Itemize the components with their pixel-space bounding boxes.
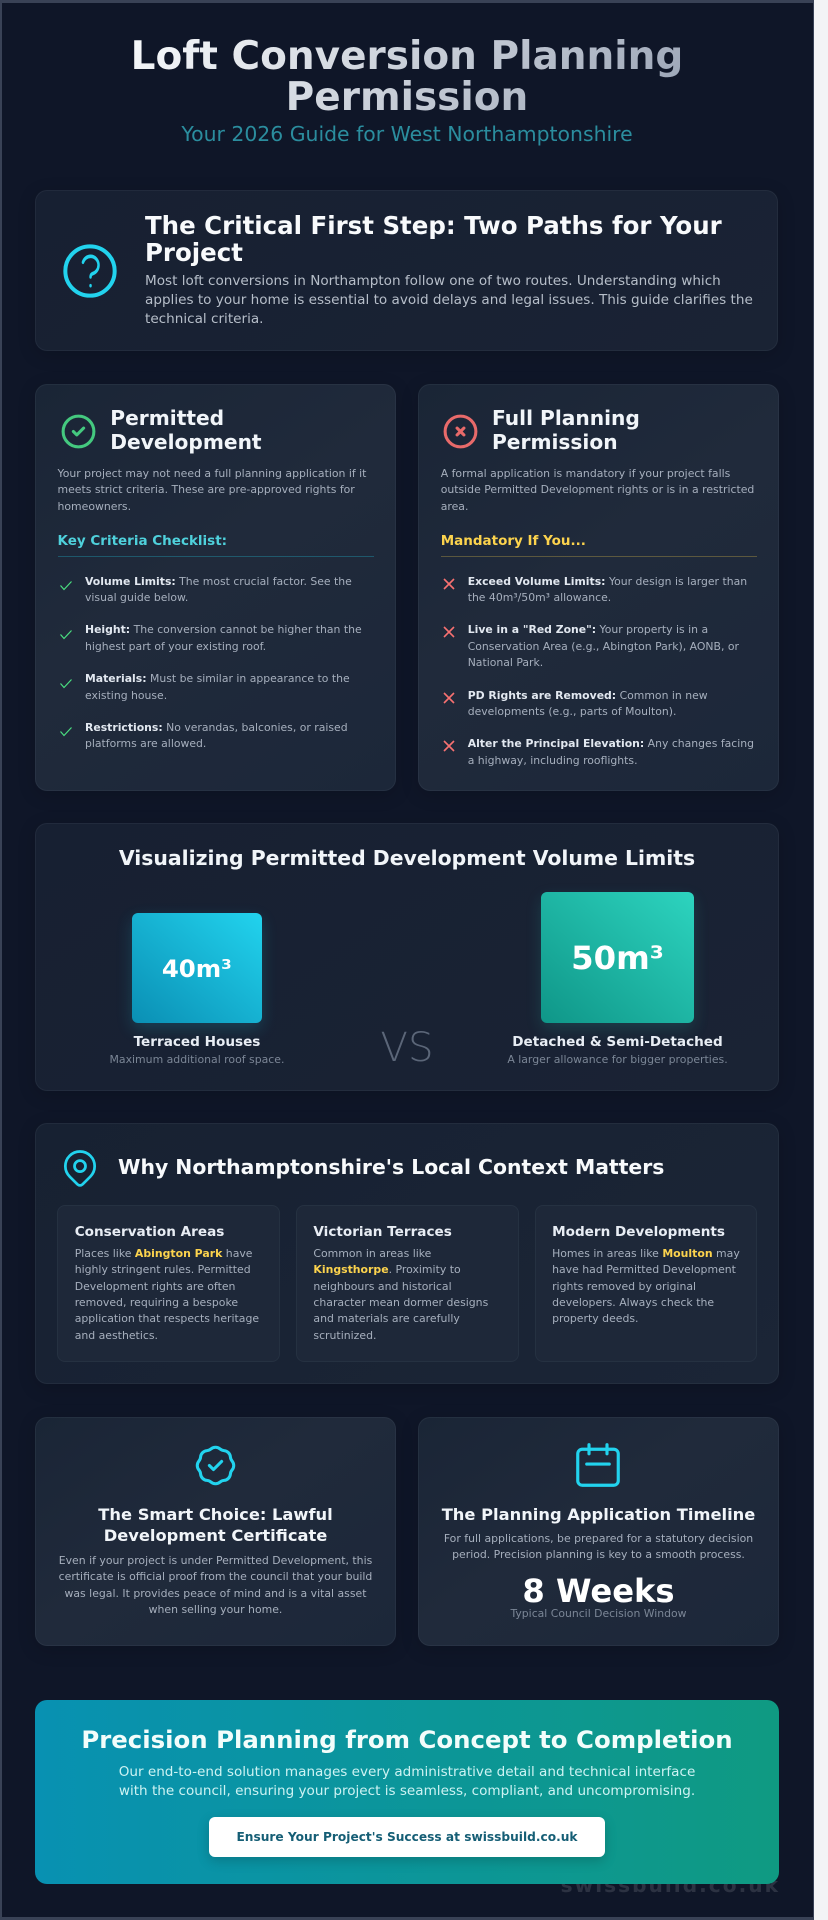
icon: check circle (62, 414, 96, 448)
caption: detached and semi-detached: A larger allowance for bigger properties. (507, 1053, 728, 1066)
heading: permitted development: Development (110, 430, 262, 454)
heading: critical first step: The Critical First Step: Two Paths for Your (145, 211, 722, 240)
intro text: Most loft conversions in Northampton follow one of two routes. Understanding which (145, 273, 721, 289)
panel: application timeline (418, 1417, 779, 1646)
certificate text: Even if your project is under Permitted Development, this (59, 1554, 372, 1567)
heading: full planning permission: Permission (492, 430, 618, 454)
description: homeowners. (58, 500, 131, 513)
checklist item: height (60, 623, 362, 653)
certificate text: was legal. It provides peace of mind and is a vital asset (64, 1587, 366, 1600)
description: meets strict criteria. These are pre-approved rights for (58, 483, 355, 496)
requirement: red zone: Conservation Area (e.g., Abington Park), AONB, or (468, 640, 739, 653)
checklist item: height: highest part of your existing roof. (85, 640, 266, 653)
card text: highly stringent rules. Permitted (75, 1263, 251, 1276)
statistic: 8 weeks: 8 Weeks (522, 1572, 675, 1610)
call to action text: with the council, ensuring your project is seamless, compliant, and uncompromising. (119, 1783, 695, 1799)
description (58, 467, 366, 513)
subheading: key criteria: Key Criteria Checklist: (58, 533, 227, 549)
volume block: 50m3: 50m³ (571, 938, 664, 976)
checklist item: restrictions (60, 721, 348, 750)
title: Permission (286, 74, 528, 120)
card title: Victorian Terraces (313, 1224, 452, 1240)
call to action text: Our end-to-end solution manages every administrative detail and technical interface (119, 1764, 695, 1780)
panel: local context (35, 1123, 779, 1384)
button (209, 1817, 605, 1857)
requirement: principal elevation (444, 737, 754, 767)
card text (75, 1247, 259, 1342)
card text: property deeds. (552, 1312, 639, 1325)
requirement: exceed volume limits: the 40m³/50m³ allowance. (468, 591, 611, 604)
panel: full planning permission: National Park. (468, 656, 543, 669)
subtitle: Your 2026 Guide for West Northamptonshire (181, 122, 633, 146)
watermark: swissbuild.co.uk (561, 1873, 780, 1897)
subheading: mandatory if you: Mandatory If You... (441, 533, 586, 549)
description: A formal application is mandatory if your project falls (441, 467, 730, 480)
description: area. (441, 500, 468, 513)
panel: permitted development (35, 384, 396, 791)
requirement: PD rights removed (444, 688, 708, 718)
label: terraced houses: Terraced Houses (134, 1034, 260, 1050)
button: Ensure Your Project's Success at swissbuild.co.uk (236, 1830, 578, 1844)
icon: badge check (196, 1446, 236, 1486)
intro text (145, 273, 753, 327)
card text: neighbours and historical (313, 1280, 452, 1293)
card text: have had Permitted Development (552, 1263, 736, 1276)
icon: question mark (63, 244, 117, 298)
card title: Modern Developments (552, 1224, 725, 1240)
label: detached and semi-detached: Detached & Semi-Detached (512, 1034, 723, 1050)
intro text: technical criteria. (145, 311, 264, 327)
heading: call to action: Precision Planning from Concept to Completion (81, 1725, 733, 1754)
heading: full planning permission (492, 406, 640, 454)
card: modern developments (535, 1205, 757, 1362)
card: conservation areas (57, 1205, 280, 1362)
timeline text: For full applications, be prepared for a statutory decision (444, 1532, 753, 1545)
certificate text (59, 1554, 372, 1616)
card text: character mean dormer designs (313, 1296, 488, 1309)
card text: Places like Abington Park have (75, 1247, 253, 1260)
call to action text (119, 1764, 695, 1799)
card text: removed, requiring a bespoke (75, 1296, 238, 1309)
panel: volume limits (35, 823, 779, 1091)
heading: permitted development (110, 406, 262, 454)
icon: location pin (64, 1150, 96, 1187)
checklist item: restrictions: platforms are allowed. (85, 737, 206, 750)
requirement: principal elevation: a highway, including rooflights. (468, 754, 638, 767)
icon: calendar (576, 1443, 620, 1487)
heading: lawful development certificate: Development Certificate (104, 1526, 327, 1545)
statistic caption: Typical Council Decision Window (510, 1607, 687, 1620)
heading: critical first step (145, 211, 722, 267)
card text: Common in areas like (313, 1247, 431, 1260)
checklist item: materials: existing house. (85, 689, 167, 702)
heading: critical first step: Project (145, 238, 243, 267)
description (440, 467, 754, 513)
heading: permitted development: Permitted (110, 406, 224, 430)
card text: rights removed by original (552, 1280, 696, 1293)
card text: Homes in areas like Moulton may (552, 1247, 740, 1260)
volume block: 40m3 (132, 913, 262, 1023)
requirement: PD rights removed: developments (e.g., parts of Moulton). (468, 705, 676, 718)
card title: Conservation Areas (75, 1224, 224, 1240)
card text (552, 1247, 740, 1325)
timeline text: period. Precision planning is key to a smooth process. (452, 1548, 745, 1561)
card text: scrutinized. (313, 1329, 376, 1342)
certificate text: when selling your home. (149, 1603, 282, 1616)
card text: and materials are carefully (313, 1312, 460, 1325)
checklist item: volume limits: visual guide below. (85, 591, 188, 604)
panel: call to action (35, 1700, 779, 1884)
checklist item: height: Height: The conversion cannot be higher than the (85, 623, 362, 636)
description: Your project may not need a full planning application if it (58, 467, 366, 480)
checklist item: materials (60, 672, 350, 702)
card text: Development rights are often (75, 1280, 235, 1293)
card text: application that respects heritage (75, 1312, 259, 1325)
heading: volume limits: Visualizing Permitted Development Volume Limits (119, 846, 695, 870)
requirement: red zone (444, 623, 739, 669)
heading: full planning permission: Full Planning (492, 406, 640, 430)
requirement: exceed volume limits: Exceed Volume Limits: Your design is larger than (468, 574, 747, 588)
caption: terraced houses: Maximum additional roof space. (110, 1053, 284, 1066)
intro text: applies to your home is essential to avoid delays and legal issues. This guide clarifies the (145, 292, 753, 308)
panel: full planning permission (418, 384, 779, 791)
title (130, 36, 684, 118)
requirement: PD rights removed: PD Rights are Removed: Common in new (468, 688, 708, 702)
certificate text: certificate is official proof from the council that your build (59, 1570, 372, 1583)
checklist item: materials: Materials: Must be similar in appearance to the (85, 672, 350, 685)
panel: lawful development certificate (35, 1417, 396, 1646)
card text (313, 1247, 488, 1342)
checklist item: restrictions: Restrictions: No verandas, balconies, or raised (85, 721, 348, 734)
versus label: VS (380, 1024, 434, 1071)
heading: lawful development certificate (98, 1504, 333, 1545)
checklist item: volume limits (60, 574, 352, 604)
requirement: exceed volume limits (444, 574, 747, 604)
icon: x circle (444, 414, 478, 448)
card: victorian terraces (296, 1205, 518, 1362)
heading: local context: Why Northamptonshire's Local Context Matters (118, 1155, 664, 1179)
title: Loft Conversion Planning (131, 34, 683, 78)
checklist item: volume limits: Volume Limits: The most crucial factor. See the (85, 574, 352, 588)
card text: developers. Always check the (552, 1296, 714, 1309)
volume block: 40m3: 40m³ (162, 954, 232, 982)
heading: application timeline: The Planning Application Timeline (442, 1504, 755, 1524)
requirement: red zone: Live in a "Red Zone": Your property is in a (468, 623, 708, 636)
panel: critical first step (35, 190, 778, 351)
heading: lawful development certificate: The Smart Choice: Lawful (98, 1504, 333, 1524)
volume block: 50m3 (541, 892, 694, 1023)
requirement: principal elevation: Alter the Principal Elevation: Any changes facing (468, 737, 754, 750)
description: outside Permitted Development rights or is in a restricted (441, 483, 754, 496)
timeline text (444, 1532, 753, 1561)
card text: Kingsthorpe. Proximity to (313, 1263, 461, 1276)
card text: and aesthetics. (75, 1329, 158, 1342)
